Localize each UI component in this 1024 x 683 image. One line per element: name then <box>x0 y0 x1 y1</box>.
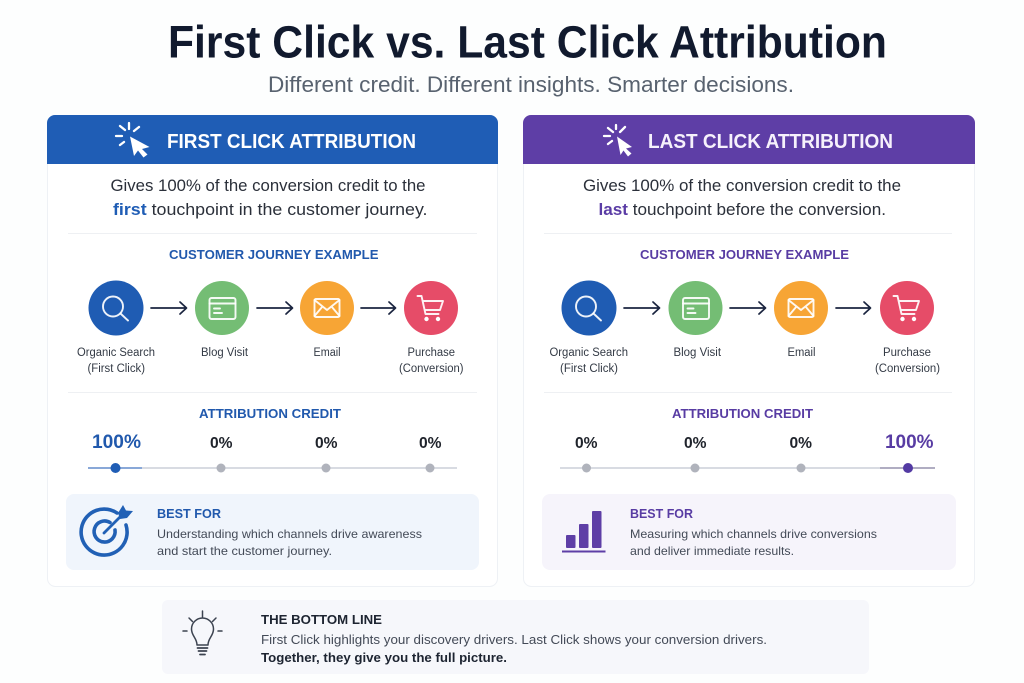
heading: attribution credit: ATTRIBUTION CREDIT <box>199 406 341 421</box>
description: Gives 100% of the conversion credit to the <box>110 177 426 195</box>
panel card <box>48 116 498 586</box>
header title: LAST CLICK ATTRIBUTION <box>648 131 893 153</box>
step: blog visit: Blog Visit <box>201 347 249 359</box>
panel: first click attribution <box>47 115 498 586</box>
description: last touchpoint before the conversion. <box>598 201 886 219</box>
credit scale: 100% <box>92 431 141 453</box>
panel header <box>523 115 975 164</box>
icon: bar chart <box>562 511 606 552</box>
journey flow <box>77 280 464 375</box>
arrow <box>361 302 396 314</box>
step: email: Email <box>314 347 340 359</box>
step: email <box>774 281 828 359</box>
credit scale <box>88 431 457 473</box>
credit scale: 0% <box>419 435 442 452</box>
arrow <box>836 302 870 314</box>
heading: attribution credit: ATTRIBUTION CREDIT <box>672 406 813 421</box>
heading: customer journey example: CUSTOMER JOURNEY EXAMPLE <box>640 247 849 262</box>
best for box <box>542 494 956 570</box>
step: email: Email <box>788 347 816 359</box>
credit scale: 0% <box>684 435 706 452</box>
arrow <box>624 302 660 314</box>
journey flow <box>550 280 940 375</box>
arrow <box>730 302 766 314</box>
step: purchase: Purchase <box>883 347 931 359</box>
heading: customer journey example: CUSTOMER JOURNEY EXAMPLE <box>169 247 379 262</box>
description: Gives 100% of the conversion credit to the <box>583 177 901 195</box>
step: purchase: Purchase <box>408 347 455 359</box>
step: email <box>300 281 354 359</box>
credit scale <box>560 431 935 473</box>
step: purchase <box>875 281 940 375</box>
step: purchase: (Conversion) <box>399 363 464 375</box>
step: blog visit <box>195 281 249 359</box>
callout: the bottom line: Together, they give you the full picture. <box>261 651 507 665</box>
callout: the bottom line <box>162 600 869 674</box>
step: organic search: (First Click) <box>560 363 618 375</box>
credit scale: 0% <box>315 435 338 452</box>
panel card <box>524 116 974 586</box>
step: organic search: Organic Search <box>77 347 155 359</box>
best for box: and start the customer journey. <box>157 544 332 558</box>
icon: cursor click <box>116 123 150 158</box>
icon: light bulb <box>183 611 222 654</box>
credit scale: 0% <box>210 435 232 452</box>
description: first touchpoint in the customer journey. <box>113 201 428 219</box>
step: organic search: Organic Search <box>550 347 628 359</box>
best for box: BEST FOR <box>157 507 221 521</box>
best for box <box>66 494 479 570</box>
header title: FIRST CLICK ATTRIBUTION <box>167 131 416 153</box>
step: blog visit: Blog Visit <box>674 347 722 359</box>
step: organic search <box>550 280 628 375</box>
step: blog visit <box>668 281 722 359</box>
arrow <box>257 302 292 314</box>
callout: the bottom line: THE BOTTOM LINE <box>261 613 382 627</box>
best for box: BEST FOR <box>630 507 693 521</box>
description <box>583 177 901 219</box>
step: purchase <box>399 281 464 375</box>
step: organic search <box>77 280 155 375</box>
icon: cursor click <box>604 125 632 156</box>
credit scale: 100% <box>885 431 934 453</box>
best for box: and deliver immediate results. <box>630 544 794 558</box>
arrow <box>151 302 186 314</box>
title: First Click vs. Last Click Attribution <box>168 16 887 68</box>
best for box: Understanding which channels drive awareness <box>157 527 422 541</box>
description <box>110 177 428 219</box>
callout: the bottom line: First Click highlights your discovery drivers. Last Click shows your conversion drivers. <box>261 633 767 647</box>
credit scale: 0% <box>575 435 598 452</box>
panel header <box>47 115 498 164</box>
subtitle: Different credit. Different insights. Smarter decisions. <box>268 72 794 97</box>
best for box: Measuring which channels drive conversions <box>630 527 877 541</box>
step: organic search: (First Click) <box>88 363 145 375</box>
panel: last click attribution <box>523 115 975 586</box>
icon: target <box>81 505 133 555</box>
step: purchase: (Conversion) <box>875 363 940 375</box>
credit scale: 0% <box>790 435 812 452</box>
